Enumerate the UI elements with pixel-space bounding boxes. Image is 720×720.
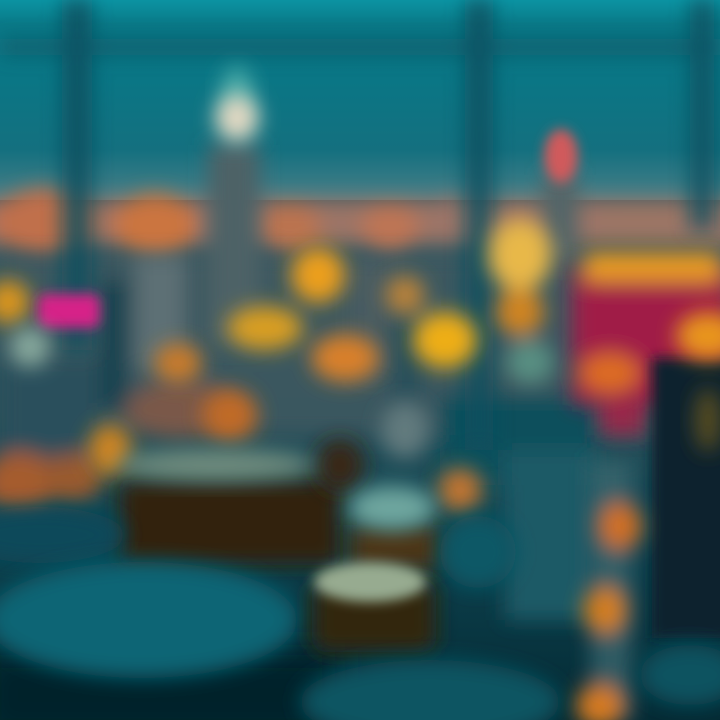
- lights: orange column: [576, 460, 642, 720]
- building: red block: [572, 252, 720, 435]
- furniture: pale counter: [348, 402, 440, 570]
- background: city and floor: [0, 200, 720, 720]
- furniture: teal ottoman: [300, 660, 560, 720]
- horizon: orange band: [0, 188, 720, 257]
- background: sky: [0, 0, 720, 200]
- city light: magenta sign: [38, 294, 100, 328]
- city: mid-ground buildings: [0, 255, 720, 620]
- building: dark foreground block: [652, 312, 720, 638]
- furniture: brown table: [115, 439, 364, 565]
- furniture: teal seat at right: [640, 645, 720, 705]
- tower: right spire with red tip: [542, 129, 578, 260]
- furniture: round teal table: [0, 562, 297, 678]
- furniture: teal stool: [440, 516, 516, 588]
- furniture: brown cup: [312, 562, 436, 652]
- tower: central skyscraper: [208, 66, 260, 345]
- furniture: teal sofa at left: [0, 507, 125, 563]
- furniture: dark floor: [0, 650, 340, 720]
- window frame: dark mullions: [0, 0, 720, 450]
- city light: pale sign: [10, 327, 50, 367]
- city lights: yellow and orange glows: [0, 219, 554, 512]
